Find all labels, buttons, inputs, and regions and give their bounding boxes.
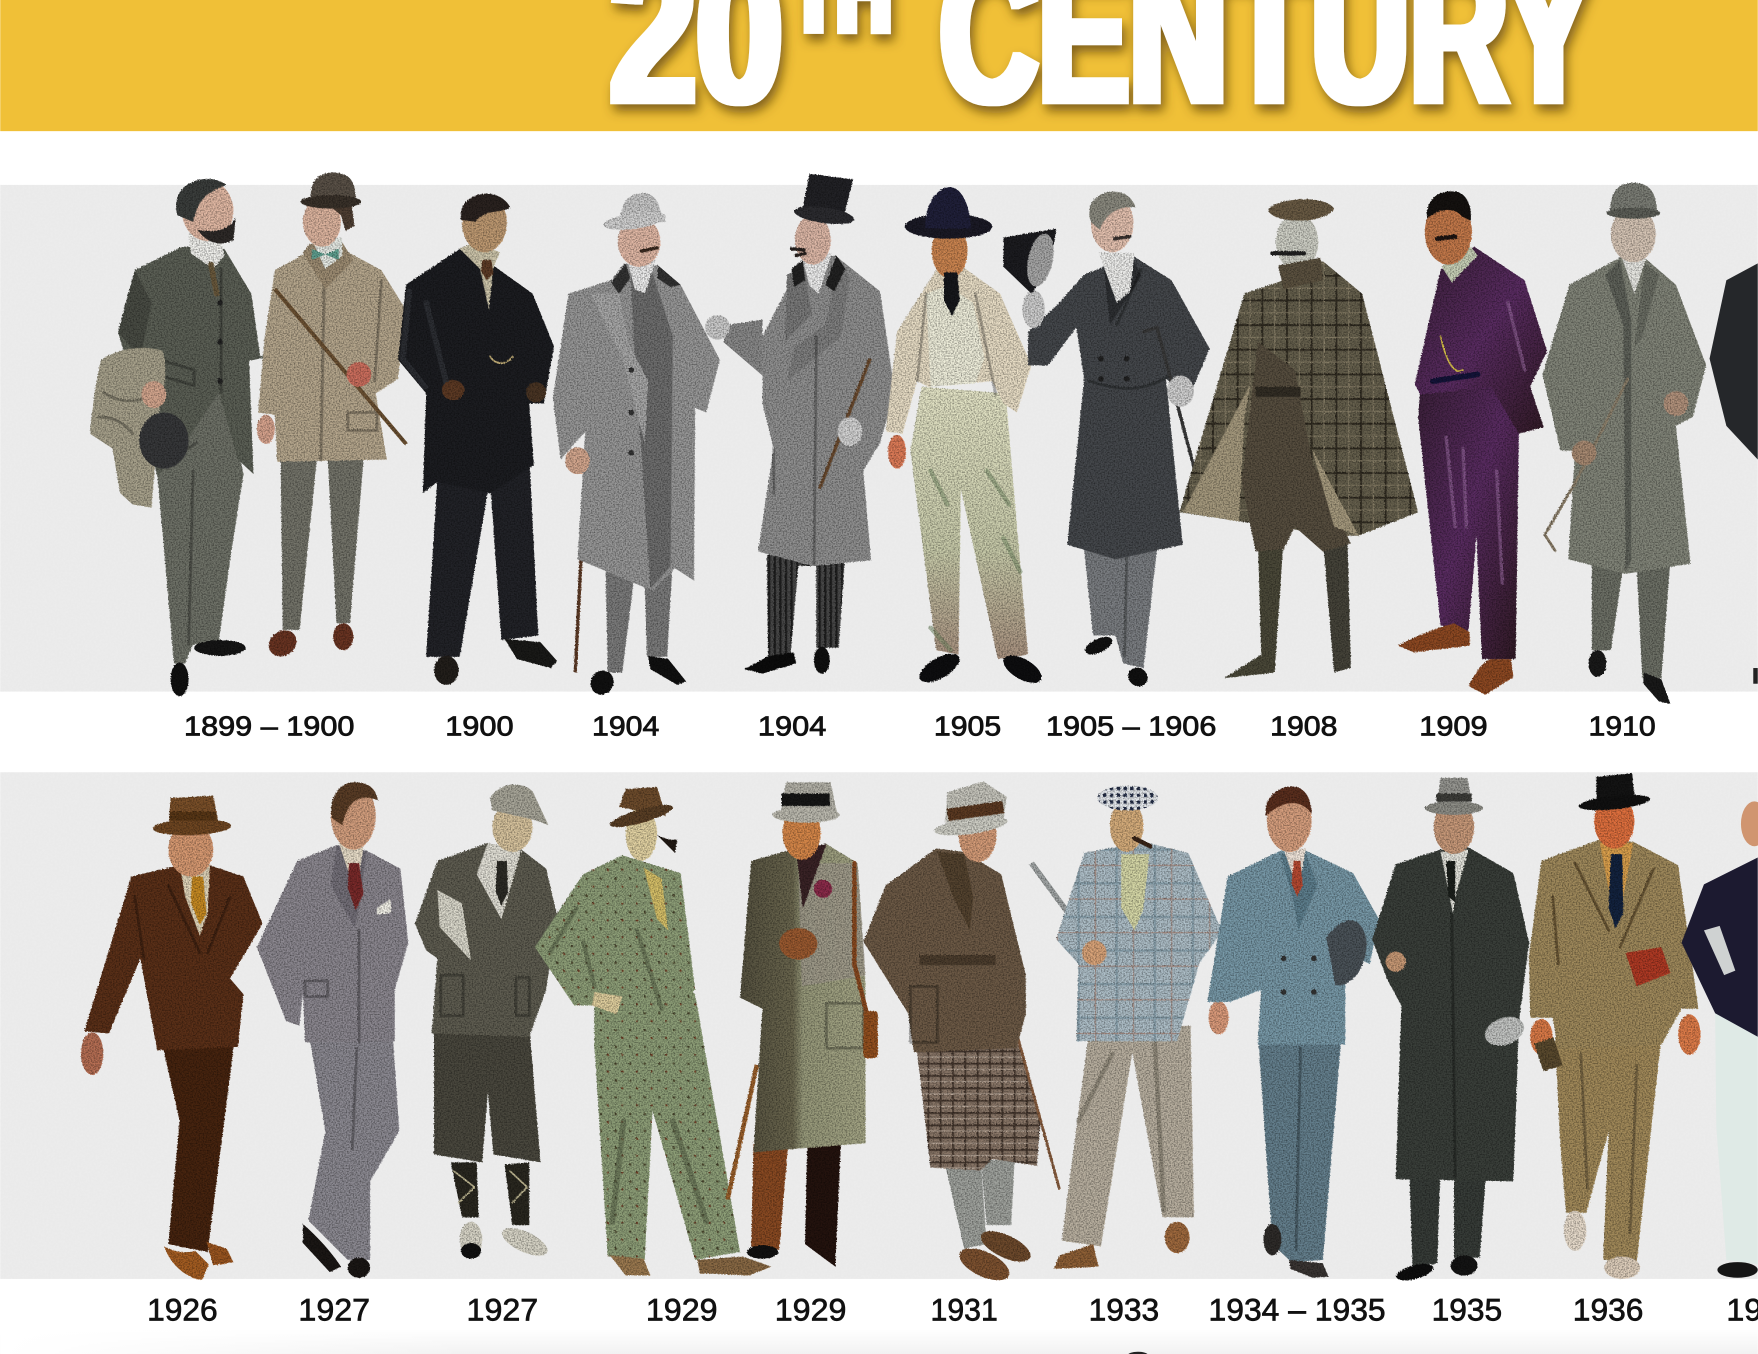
figure: 1900 man in black suit	[398, 194, 557, 685]
figure: 1929 man in green speckled suit with pipe	[535, 787, 771, 1276]
year labels: row 1	[184, 710, 1656, 741]
figure: 1904 man in top hat and grey coat	[705, 174, 895, 674]
figure: 1927 man in knickerbockers and flat cap	[415, 785, 557, 1261]
year labels: row 1: 1899 – 1900	[184, 710, 354, 741]
year labels: row 1: 1904	[758, 710, 826, 741]
year labels: row 2: 1926	[147, 1292, 218, 1327]
year labels: row 1: 1905	[934, 710, 1001, 741]
year labels: row 1: 1900	[445, 710, 514, 741]
figure: 1910 man in grey overcoat with bowler	[1543, 183, 1706, 704]
figure: 1929 man in two-tone overcoat with cane	[728, 782, 878, 1267]
year labels: row 2: 1935	[1432, 1292, 1502, 1327]
year labels: row 2: 1927	[298, 1292, 370, 1327]
figure: 1934-1935 man in blue double-breasted suit	[1207, 787, 1379, 1278]
year labels: row 1: 1909	[1419, 710, 1488, 741]
year labels: row 2: 1933	[1089, 1292, 1159, 1327]
figure: 1931 man in belted jacket and plaid knickers	[863, 781, 1059, 1287]
year labels: row 2: 1934 – 1935	[1209, 1292, 1386, 1327]
figure: 1899 gentleman in tan coat with cane	[257, 173, 406, 662]
year labels: row 2: 1927	[467, 1292, 538, 1327]
figure: 1904 man in grey overcoat with cane	[553, 193, 720, 699]
year labels: row 2: 1929	[646, 1292, 718, 1327]
year labels: row 1: 1910	[1589, 710, 1656, 741]
figure: partial man in navy blazer at right edge	[1682, 801, 1758, 1278]
year labels: row 1: 1904	[592, 710, 659, 741]
year labels: row 2	[147, 1292, 1758, 1327]
panel: row 1 background	[0, 185, 1758, 692]
figure: 1899 gentleman in grey-green suit	[90, 179, 316, 696]
figure: 1909 man in purple suit	[1398, 191, 1547, 695]
year labels: row 2: 1931	[931, 1292, 998, 1327]
figure: 1935 man in long black overcoat	[1372, 778, 1529, 1284]
figure: 1933 man in plaid jacket and check cap	[1031, 786, 1222, 1269]
year labels: row 2: 1929	[775, 1292, 846, 1327]
figure: 1936 man in tan suit with red bag	[1529, 773, 1701, 1279]
figure: partial dark coat at right edge	[1710, 263, 1758, 684]
figure: 1908 man in plaid cape and cap	[1179, 199, 1418, 678]
title banner	[0, 0, 1758, 145]
figure: 1905-1906 man in dark frock coat with top hat	[1003, 192, 1210, 690]
panel: row 2 background	[0, 772, 1758, 1279]
figure: 1927 man in grey suit	[257, 782, 408, 1278]
bottom edge: next row fade	[0, 1329, 1758, 1354]
year labels: row 1: 1908	[1270, 710, 1337, 741]
figure: 1905 man in cream suit and black hat	[886, 187, 1046, 689]
figure: 1926 man in brown suit	[81, 796, 263, 1280]
year labels: row 1: 1905 – 1906	[1046, 710, 1216, 741]
year labels: row 2: 1936	[1573, 1292, 1643, 1327]
title: 20th century	[606, 0, 1596, 120]
